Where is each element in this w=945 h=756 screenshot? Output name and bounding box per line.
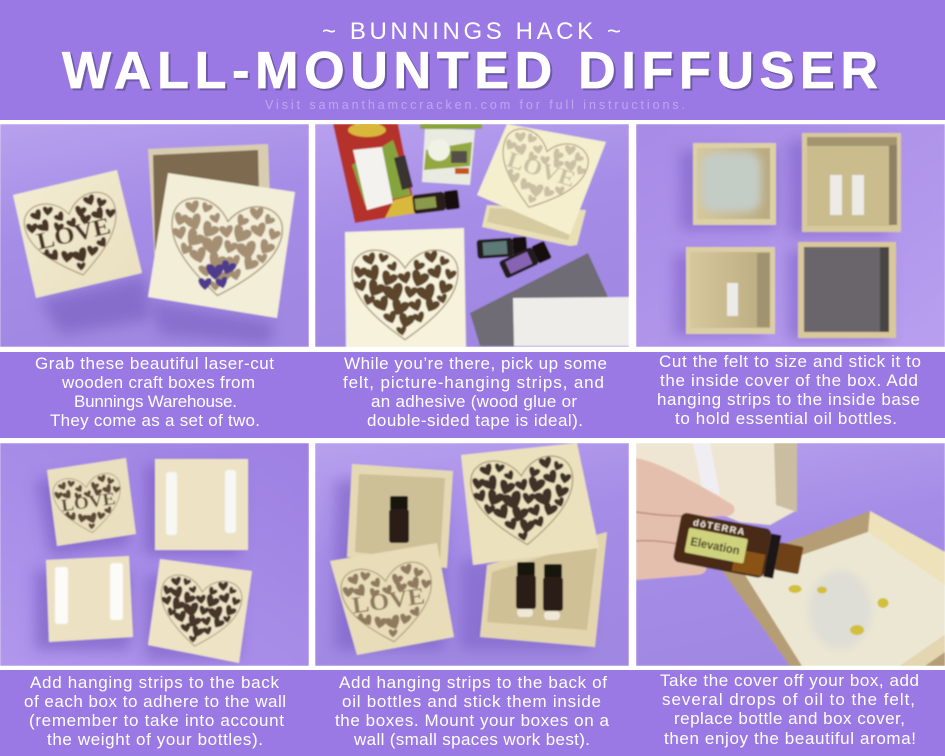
caption 2: felt, picture-hanging strips, and	[343, 373, 604, 392]
back box	[636, 443, 797, 525]
LOVE lid and box	[477, 124, 606, 246]
caption 1: Bunnings Warehouse.	[74, 392, 237, 411]
box with gray felt	[798, 242, 896, 338]
caption 6: several drops of oil to the felt,	[662, 690, 915, 709]
box with white felt	[693, 143, 776, 225]
second box back	[46, 556, 133, 642]
caption 2: an adhesive (wood glue or	[371, 392, 577, 411]
photo 6: adding oil drops	[636, 443, 945, 666]
bottle: Elevation	[689, 534, 741, 558]
caption 2: double-sided tape is ideal).	[367, 411, 583, 430]
caption 3: hanging strips to the inside base	[657, 390, 920, 409]
hanging strips package	[333, 123, 416, 223]
caption 3	[657, 352, 921, 428]
caption 1: They come as a set of two.	[50, 411, 260, 430]
box with one strip	[686, 247, 775, 334]
photo 2: materials	[315, 123, 629, 347]
caption 6: then enjoy the beautiful aroma!	[664, 729, 916, 748]
felt tray	[720, 511, 945, 666]
photo 1: two laser-cut boxes	[0, 124, 309, 347]
caption 4: (remember to take into account	[29, 711, 284, 730]
caption band: row 2	[0, 670, 945, 756]
caption 6: replace bottle and box cover,	[674, 709, 905, 728]
hand and fingers	[636, 458, 735, 580]
small strips package	[420, 124, 482, 185]
box back with strips	[155, 459, 248, 550]
caption 1: wooden craft boxes from	[61, 373, 255, 392]
bottle	[672, 512, 806, 585]
bottle: dōTERRA	[692, 517, 745, 538]
caption 5: oil bottles and stick them inside	[342, 692, 601, 711]
hearts lid	[148, 559, 252, 663]
bottles middle	[476, 237, 528, 259]
LOVE lid	[47, 458, 136, 546]
caption band: row 1	[0, 352, 945, 438]
caption 4: the weight of your bottles).	[47, 730, 263, 749]
open box with one bottle	[347, 464, 453, 568]
website note: Visit samanthamccracken.com for full instructions.	[265, 98, 685, 112]
gray felt	[470, 253, 608, 346]
open box base	[148, 144, 270, 262]
caption 6: Take the cover off your box, add	[660, 671, 919, 690]
box with two strips	[802, 133, 901, 232]
open box with two bottles	[480, 532, 607, 647]
left lid with LOVE heart	[13, 170, 142, 298]
photo 5: bottles in boxes	[315, 443, 629, 666]
caption 3: the inside cover of the box. Add	[660, 371, 918, 390]
white felt	[513, 297, 629, 346]
caption 6	[660, 671, 919, 748]
LOVE lid	[330, 543, 454, 655]
caption 3: Cut the felt to size and stick it to	[659, 352, 921, 371]
photo 4: strips on box backs	[0, 443, 309, 666]
header band	[0, 0, 945, 120]
hearts lid	[461, 443, 599, 565]
caption 5: the boxes. Mount your boxes on a	[335, 711, 610, 730]
hearts lid	[345, 228, 466, 347]
caption 4	[24, 673, 286, 749]
oil bottle top	[412, 190, 460, 214]
caption 5: wall (small spaces work best).	[353, 730, 590, 749]
caption 2: While you’re there, pick up some	[344, 354, 607, 373]
subtitle: ~ BUNNINGS HACK ~	[322, 18, 621, 45]
photo 3: felt and strips in boxes	[636, 124, 945, 347]
caption 3: to hold essential oil bottles.	[675, 409, 897, 428]
caption 1	[35, 354, 274, 430]
caption 2	[343, 354, 607, 430]
caption 4: Add hanging strips to the back	[30, 673, 280, 692]
caption 5: Add hanging strips to the back of	[339, 673, 607, 692]
caption 1: Grab these beautiful laser-cut	[35, 354, 274, 373]
caption 5	[335, 673, 610, 749]
right lid with hearts	[148, 173, 295, 318]
caption 4: of each box to adhere to the wall	[24, 692, 286, 711]
oil drops	[788, 585, 888, 635]
main title: WALL-MOUNTED DIFFUSER	[62, 42, 878, 100]
